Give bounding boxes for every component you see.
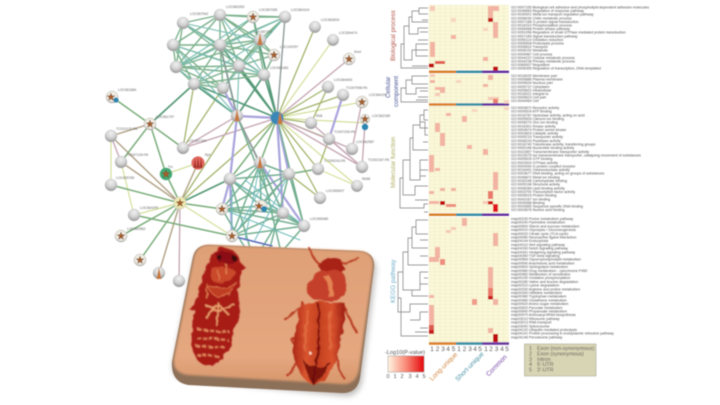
gene labels: LOC664400: [334, 78, 352, 82]
column numbers: 2: [489, 346, 493, 353]
feature type legend: [524, 344, 596, 376]
row labels: map00980 Drug metabolism - cytochrome P450: [511, 269, 587, 273]
gene labels: LOC662587: [356, 140, 374, 144]
row labels: GO:0009987 Cell process: [511, 52, 553, 56]
beetle photo panel: [172, 245, 376, 396]
gene labels: LOC660263: [226, 5, 244, 9]
gene labels: Rpf: [205, 153, 210, 157]
row labels: map04310 Wnt signaling pathway: [511, 243, 565, 247]
feature type legend: Intron: [537, 357, 551, 363]
column numbers: 5: [505, 346, 509, 353]
row labels: map00640 Propanoate metabolism: [511, 310, 567, 314]
column numbers: 1: [484, 346, 488, 353]
section titles: Molecular function: [390, 136, 397, 188]
row labels: GO:0006355 Regulation of transcription, DNA-templated: [511, 67, 601, 71]
column numbers: 2: [436, 346, 440, 353]
beetle: dorsal view: [284, 249, 358, 384]
row labels: GO:0044237 Cellular metabolic process: [511, 56, 575, 60]
column numbers: 4: [500, 346, 504, 353]
gene labels: Sm4: [354, 50, 361, 54]
panel face: [174, 245, 373, 384]
row labels: GO:0008270 Zinc ion binding: [511, 121, 558, 125]
spiked nodes: [153, 33, 283, 279]
row labels: map00020 Citrate cycle (TCA cycle): [511, 232, 568, 236]
gene labels: LOC659007: [326, 189, 344, 193]
feature type legend: 1: [529, 346, 532, 352]
row labels: GO:0030001 Metal ion transport regulation pathway: [511, 13, 594, 17]
row labels: GO:0003677 DNA binding, acting on groups of substances: [511, 172, 605, 176]
row labels: map03040 Spliceosome: [511, 324, 550, 328]
row labels: map00340 Histidine metabolism: [511, 291, 562, 295]
gene labels: Rb8: [316, 114, 322, 118]
row labels: GO:0022857 Transmembrane transporter activity: [511, 150, 589, 154]
gene labels: Rb58: [362, 177, 370, 181]
gene labels: TC007200-PA: [334, 130, 356, 134]
row labels: GO:0044238 Primary metabolic process: [511, 59, 575, 63]
row labels: GO:0006030 Chitin metabolic process: [511, 16, 572, 20]
gene labels: LOC100297: [280, 45, 298, 49]
row labels: GO:0003924 GTPase activity: [511, 161, 558, 165]
row labels: map00982 Metabolism of xenobiotics: [511, 272, 571, 276]
row labels: GO:0003676 Nucleic acid binding: [511, 208, 565, 212]
row labels: GO:0015075 Ion transmembrane transporter, catalyzing movement of substances: [511, 153, 641, 157]
row labels: GO:0005524 ATP binding: [511, 110, 552, 114]
gene labels: TC007998-PA: [346, 86, 368, 90]
row labels: map03010 Ribosome pathway: [511, 317, 560, 321]
column numbers: [430, 346, 509, 353]
row labels: map00010 Glycolysis / Gluconeogenesis: [511, 228, 576, 232]
gene nodes: [105, 9, 368, 287]
row labels: map00280 Valine and leucine degradation: [511, 280, 578, 284]
gene labels: LOC661684: [118, 88, 136, 92]
feature type legend: 3'-UTR: [537, 368, 554, 374]
row labels: map00520 Amino sugar metabolism: [511, 302, 568, 306]
row labels: GO:0065007 Regulation: [511, 63, 550, 67]
row labels: GO:0007155 Biological cell adhesion and phospholipid-dependent adhesion molecules: [511, 6, 649, 10]
row labels: GO:0000166 Nucleotide binding activity: [511, 146, 574, 150]
heat cells: [429, 6, 509, 342]
row labels: map00240 Pyrimidine metabolism: [511, 221, 565, 225]
row labels: GO:0004872 Receptor activity: [511, 106, 559, 110]
gene labels: TC010120-PA: [116, 127, 138, 131]
color scale legend: 0: [386, 374, 390, 380]
network diagram: [105, 5, 390, 287]
row labels: map04120 Ubiquitin mediated proteolysis: [511, 328, 577, 332]
row labels: GO:0005525 GTP binding: [511, 157, 552, 161]
row labels: map04146 Peroxisome pathway: [511, 335, 563, 339]
column numbers: 3: [441, 346, 445, 353]
row labels: GO:0007165 Signal transduction pathway: [511, 34, 578, 38]
feature type legend: 3: [529, 357, 532, 363]
group labels: Long-unique: [429, 351, 459, 383]
row labels: map00590 Arachidonic acid metabolism: [511, 261, 575, 265]
gene labels: LOC657184: [188, 139, 206, 143]
gene labels: LOC661797: [156, 115, 174, 119]
row labels: map00330 Arginine and proline metabolism: [511, 287, 580, 291]
row labels: map00380 Tryptophan metabolism: [511, 295, 566, 299]
row labels: GO:0005215 Transporter activity: [511, 135, 563, 139]
panel shadow: [173, 250, 376, 396]
column numbers: 2: [463, 346, 467, 353]
row labels: GO:0005509 Calcium ion binding: [511, 117, 564, 121]
row labels: GO:0005737 Cytoplasm: [511, 85, 550, 89]
gene labels: LOC664197: [369, 93, 387, 97]
row labels: GO:0055114 Oxidation reduction: [511, 38, 563, 42]
row labels: [511, 6, 649, 339]
gene labels: TC009243-PA: [324, 159, 346, 163]
row labels: GO:0008152 Metabolic: [511, 49, 548, 53]
section titles: Cellular: [385, 77, 392, 98]
row labels: map04141 Protein processing in endoplasmic reticulum pathway: [511, 332, 614, 336]
row labels: GO:0016021 Integral to: [511, 92, 549, 96]
dendrograms: [398, 8, 428, 336]
row labels: GO:0016491 Oxidoreductase activity: [511, 168, 570, 172]
row labels: GO:0016740 Transferase activity, transferring groups: [511, 142, 596, 146]
row labels: GO:0006468 Protein kinase pathway: [511, 27, 570, 31]
row labels: map00970 Aminoacyl-tRNA biosynthesis: [511, 313, 576, 317]
gene labels: LOC660583: [127, 227, 145, 231]
feature type legend: 5: [529, 368, 532, 374]
panel base: [172, 245, 374, 393]
row labels: GO:0006508 Proteolysis process: [511, 42, 564, 46]
row labels: map00620 Pyruvate metabolism: [511, 306, 563, 310]
beetle: ventral view: [190, 248, 246, 365]
row labels: GO:0007186 G-protein signal transduction: [511, 20, 579, 24]
gene labels: LOC657372: [254, 30, 272, 34]
row labels: GO:0005886 Plasma membrane: [511, 78, 563, 82]
color scale legend: [385, 350, 426, 380]
row labels: map04341 Hedgehog signaling pathway: [511, 250, 575, 254]
gene labels: LOC657942: [190, 12, 208, 16]
row labels: GO:0048583 Regulation of response pathway: [511, 9, 584, 13]
section titles: [385, 10, 400, 303]
heatmap figure: [385, 5, 649, 383]
column numbers: 3: [495, 346, 499, 353]
color scale legend: 4: [415, 374, 419, 380]
group labels: [429, 351, 509, 383]
column numbers: 4: [446, 346, 450, 353]
feature type legend: Exon (synonymous): [537, 352, 584, 358]
group labels: Common: [485, 354, 509, 378]
row labels: GO:0008289 Lipid binding activity: [511, 186, 565, 190]
gene labels: LOC655480: [310, 217, 328, 221]
row labels: GO:0003700 Transcription factor activity: [511, 190, 575, 194]
row labels: map00500 Starch and sucrose metabolism: [511, 224, 579, 228]
section titles: KEGG pathway: [390, 259, 397, 303]
row labels: map00310 Lysine degradation: [511, 284, 559, 288]
column numbers: 3: [468, 346, 472, 353]
column numbers: 1: [430, 346, 434, 353]
star nodes: [106, 11, 370, 266]
column numbers: 1: [457, 346, 461, 353]
row labels: map00190 Oxidative phosphorylation: [511, 276, 570, 280]
row labels: GO:0016301 Kinase activity: [511, 124, 556, 128]
column numbers: 5: [452, 346, 456, 353]
feature type legend: 4: [529, 362, 532, 368]
gene labels: LOC659789: [116, 176, 134, 180]
row labels: GO:0046872 Metal ion binding: [511, 175, 560, 179]
row labels: GO:0051056 Regulation of small GTPase mediated protein transduction: [511, 31, 626, 35]
row labels: map04350 TGF-beta signaling: [511, 254, 559, 258]
feature type legend: 2: [529, 352, 532, 358]
column numbers: 5: [478, 346, 482, 353]
row labels: GO:0004930 G-protein coupled receptor: [511, 164, 576, 168]
gene labels: LOC661083: [270, 66, 288, 70]
section titles: Biological process: [390, 10, 397, 61]
gene labels: Trx: [168, 165, 173, 169]
row labels: GO:0003824 Catalytic activity: [511, 132, 559, 136]
row labels: GO:0044464 Cell: [511, 99, 539, 103]
gene labels: LOC664104: [291, 8, 309, 12]
color scale legend: 3: [408, 374, 412, 380]
row labels: map00600 Sphingolipid metabolism: [511, 265, 568, 269]
row labels: GO:0043167 Ion binding: [511, 197, 550, 201]
row labels: map00230 Purine metabolism pathway: [511, 217, 573, 221]
row labels: map04144 Endocytosis: [511, 239, 549, 243]
color scale legend: 1: [393, 374, 397, 380]
gene labels: [116, 5, 390, 231]
grid and row bands: [429, 5, 509, 345]
row labels: GO:0005198 Structural activity: [511, 183, 560, 187]
gene labels: LOC663004: [321, 18, 339, 22]
row labels: map00480 Glutathione metabolism: [511, 298, 567, 302]
row labels: GO:0006810 Transport: [511, 45, 548, 49]
row labels: map03013 RNA transport: [511, 321, 552, 325]
color scale legend: 5: [422, 374, 426, 380]
row labels: GO:0030246 Carbohydrate binding: [511, 179, 567, 183]
row labels: GO:0016787 Hydrolase activity, acting on acid: [511, 113, 585, 117]
row labels: GO:0005488 Binding: [511, 201, 545, 205]
gene labels: LOC664299: [140, 206, 158, 210]
row labels: GO:0016310 Phosphorylation process: [511, 24, 572, 28]
row labels: GO:0004674 Protein serine kinase: [511, 128, 566, 132]
color scale legend: -Log10(P-value): [385, 350, 425, 356]
feature type legend: Exon (non-synonymous): [537, 346, 595, 352]
row labels: map04080 Neuroactive ligand interaction: [511, 236, 576, 240]
row labels: GO:0008233 Peptidase activity: [511, 139, 561, 143]
column numbers: 4: [473, 346, 477, 353]
row labels: GO:0005515 Protein binding: [511, 194, 557, 198]
gene labels: LOC657065: [259, 8, 277, 12]
group labels: Short-unique: [454, 351, 486, 383]
gene labels: LOC654474: [339, 31, 357, 35]
row labels: GO:0016020 Membrane part: [511, 74, 557, 78]
network edges: [111, 15, 365, 281]
gene labels: TC002187-PA: [368, 158, 390, 162]
row labels: GO:0005623 Cell part: [511, 96, 546, 100]
row labels: map00564 Glycerophospholipid metabolism: [511, 258, 581, 262]
gene labels: TC007109-PA: [127, 153, 149, 157]
feature type legend: 5'-UTR: [537, 362, 554, 368]
color scale legend: 2: [400, 374, 404, 380]
section titles: component: [393, 76, 400, 107]
row labels: GO:0043565 Sequence-specific DNA binding: [511, 205, 583, 209]
row labels: map04330 Notch signaling pathway: [511, 247, 568, 251]
row labels: GO:0005634 Nucleus part: [511, 81, 553, 85]
row labels: GO:0005622 Intracellular: [511, 88, 552, 92]
gene labels: LOC662180: [372, 114, 390, 118]
legs and antennae: [284, 249, 358, 378]
